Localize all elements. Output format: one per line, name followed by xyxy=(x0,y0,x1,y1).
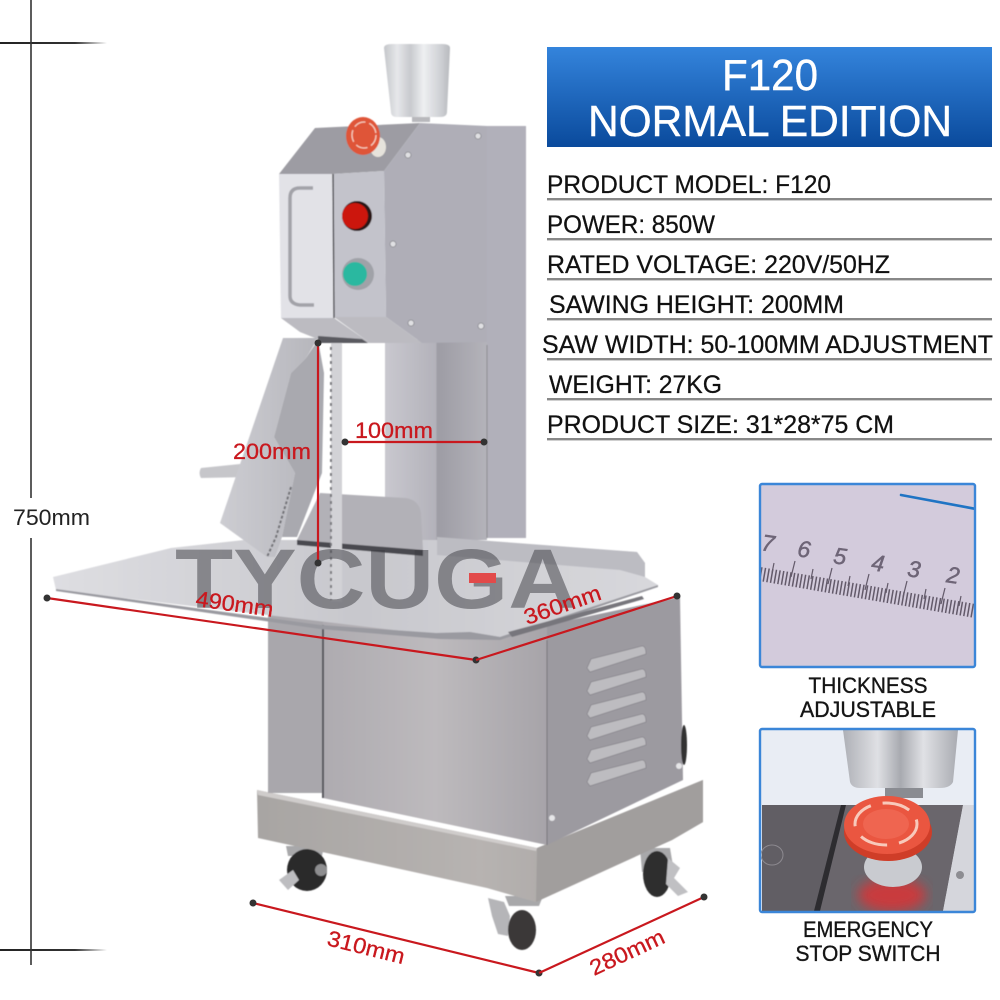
ruler numbers: 7 xyxy=(760,529,777,557)
detail photo: emergency stop switch xyxy=(760,729,975,912)
dimension: 310mm: 310mm xyxy=(325,926,407,969)
dimension: 280mm: 280mm xyxy=(586,924,669,981)
title banner: NORMAL EDITION xyxy=(588,97,952,146)
specification list: SAWING HEIGHT: 200MM xyxy=(549,291,844,319)
dimension: 490mm: 490mm xyxy=(194,586,275,622)
specification list: POWER: 850W xyxy=(547,211,715,239)
ruler numbers: 6 xyxy=(796,535,812,563)
saw blade xyxy=(331,340,342,602)
vents xyxy=(587,646,646,786)
column xyxy=(385,126,526,540)
specification list: PRODUCT MODEL: F120 xyxy=(547,171,831,199)
dimension: 360mm: 360mm xyxy=(520,580,604,630)
screws xyxy=(390,133,484,329)
base frame xyxy=(257,780,703,902)
head left face xyxy=(279,174,334,318)
specification list: RATED VOLTAGE: 220V/50HZ xyxy=(547,251,890,279)
cabinet xyxy=(268,597,687,845)
emergency stop xyxy=(346,117,386,157)
head control face xyxy=(333,171,386,320)
ruler ticks xyxy=(760,574,975,611)
caption: thickness adjustable: ADJUSTABLE xyxy=(800,697,936,722)
caption: thickness adjustable: THICKNESS xyxy=(808,673,928,698)
handle xyxy=(290,188,314,305)
specification list: WEIGHT: 27KG xyxy=(549,371,722,399)
head underside xyxy=(281,317,422,343)
wheels xyxy=(279,846,688,950)
machine head xyxy=(279,117,487,343)
dimension: 100mm xyxy=(342,418,488,446)
dimension: 490mm xyxy=(44,586,480,664)
push plate guard xyxy=(200,338,324,557)
dimension: 310mm xyxy=(250,900,542,976)
indicator: red light xyxy=(342,201,372,231)
dimension: 360mm xyxy=(476,580,680,660)
dimension: 100mm: 100mm xyxy=(355,418,433,443)
detail photo: thickness scale xyxy=(760,484,976,667)
watermark: TYCUGA: TYCUGA xyxy=(175,532,577,626)
product photo: bone saw machine xyxy=(53,44,703,950)
ruler numbers: 3 xyxy=(906,555,922,583)
head right panel xyxy=(384,123,487,343)
specification list: SAW WIDTH: 50-100MM ADJUSTMENT xyxy=(542,331,993,359)
title banner xyxy=(547,47,992,147)
caption: emergency stop switch xyxy=(796,917,940,966)
dimension: 200mm xyxy=(233,340,322,566)
specification list: PRODUCT SIZE: 31*28*75 CM xyxy=(547,411,894,439)
ruler numbers xyxy=(763,534,960,584)
indicator: green light xyxy=(342,258,374,290)
ruler numbers: 4 xyxy=(870,549,886,577)
caption: emergency stop switch: EMERGENCY xyxy=(803,917,933,942)
rear blade guard xyxy=(297,493,423,550)
dimension: 280mm xyxy=(539,894,708,981)
overall height dimension: 750mm: 750mm xyxy=(13,505,90,530)
ruler numbers: 2 xyxy=(944,561,961,589)
worktable xyxy=(53,537,658,640)
specification list xyxy=(542,171,993,440)
caption: thickness adjustable xyxy=(800,673,936,722)
dimension: 200mm: 200mm xyxy=(233,439,311,464)
top faces xyxy=(279,123,420,174)
top knob xyxy=(384,44,450,122)
title banner: F120 xyxy=(722,51,818,100)
caption: emergency stop switch: STOP SWITCH xyxy=(796,941,940,966)
ruler numbers: 5 xyxy=(832,542,848,570)
